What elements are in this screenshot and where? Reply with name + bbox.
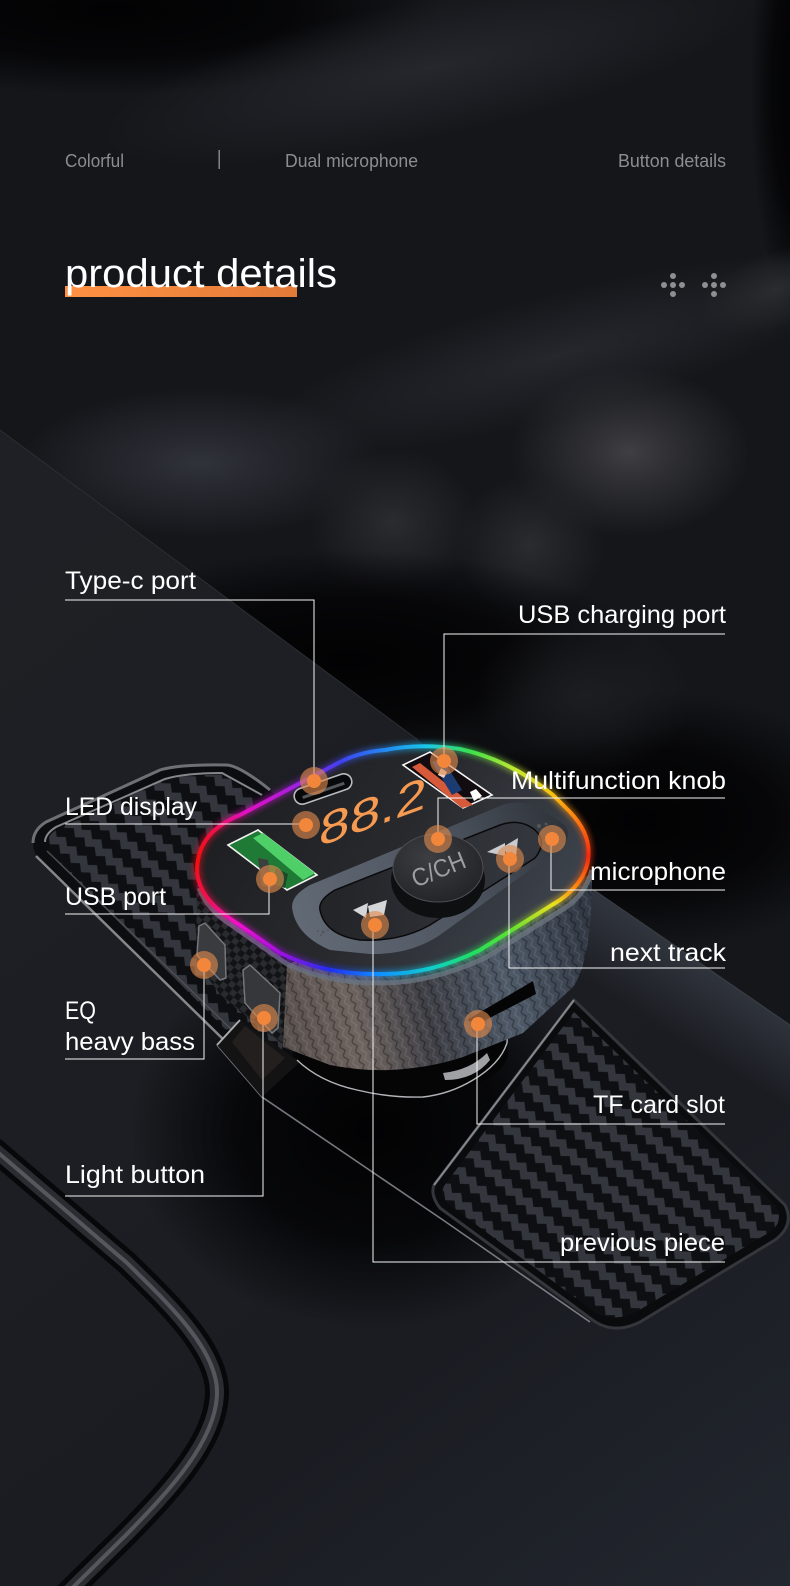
callout: Multifunction knob: Multifunction knob [511, 767, 726, 795]
callout: EQ heavy bass: heavy bass [65, 1028, 195, 1056]
TF card slot [467, 981, 536, 1024]
red USB port [403, 752, 492, 808]
callout: Type-c port [65, 567, 328, 795]
callout: Light button: Light button [65, 1161, 205, 1189]
callout: LED display [65, 793, 320, 839]
callout: EQ heavy bass: EQ [65, 997, 96, 1025]
control bar [292, 802, 568, 954]
callout: next track [496, 845, 727, 968]
top nav: Colorful: Colorful [65, 151, 124, 171]
rainbow LED ring [195, 744, 591, 976]
top nav: Button details: Button details [618, 151, 726, 171]
knob label: C/CH [408, 846, 470, 893]
next icon [487, 838, 518, 857]
callout: Light button [65, 1004, 278, 1196]
title underline [65, 286, 297, 297]
top nav: Dual microphone: Dual microphone [285, 151, 418, 171]
callout: EQ heavy bass [65, 951, 218, 1059]
cable [0, 1150, 217, 1586]
right carbon pad [217, 1000, 788, 1328]
microphone holes [317, 823, 547, 936]
callout: microphone [538, 825, 726, 890]
left carbon pad [33, 765, 330, 1070]
callout: Multifunction knob [424, 767, 726, 853]
bracket base under device [217, 1008, 508, 1097]
icon: dotted ornaments [661, 273, 726, 297]
LED digits readout: 88.2 [317, 767, 429, 857]
callout: LED display: LED display [65, 793, 197, 821]
light button [243, 965, 280, 1033]
callout: USB port: USB port [65, 883, 166, 911]
title: product details [65, 252, 337, 296]
callout: next track: next track [610, 939, 727, 967]
callout: USB charging port [430, 601, 726, 775]
callout: USB port [65, 865, 284, 914]
device body left carbon [196, 880, 310, 1050]
device shadow [130, 930, 610, 1330]
callout: Type-c port: Type-c port [65, 567, 196, 595]
green USB port [228, 830, 317, 890]
type-c slot [292, 772, 354, 806]
rainbow glow [190, 738, 596, 982]
callout: microphone: microphone [590, 858, 726, 886]
callout: USB charging port: USB charging port [518, 601, 726, 629]
callout: TF card slot [464, 1010, 725, 1124]
top face [197, 746, 589, 974]
callout: previous piece: previous piece [560, 1229, 725, 1257]
silver rim [199, 870, 592, 983]
top nav divider [218, 150, 220, 169]
table surface [0, 430, 790, 1586]
carbon texture on side [283, 875, 592, 1070]
previous icon [353, 900, 387, 918]
callout: previous piece [361, 911, 725, 1262]
EQ button [197, 923, 226, 980]
car charger device [190, 738, 596, 1070]
control pill [320, 822, 542, 940]
knob [391, 834, 485, 918]
device body side [283, 875, 592, 1070]
callout: TF card slot: TF card slot [593, 1091, 725, 1119]
